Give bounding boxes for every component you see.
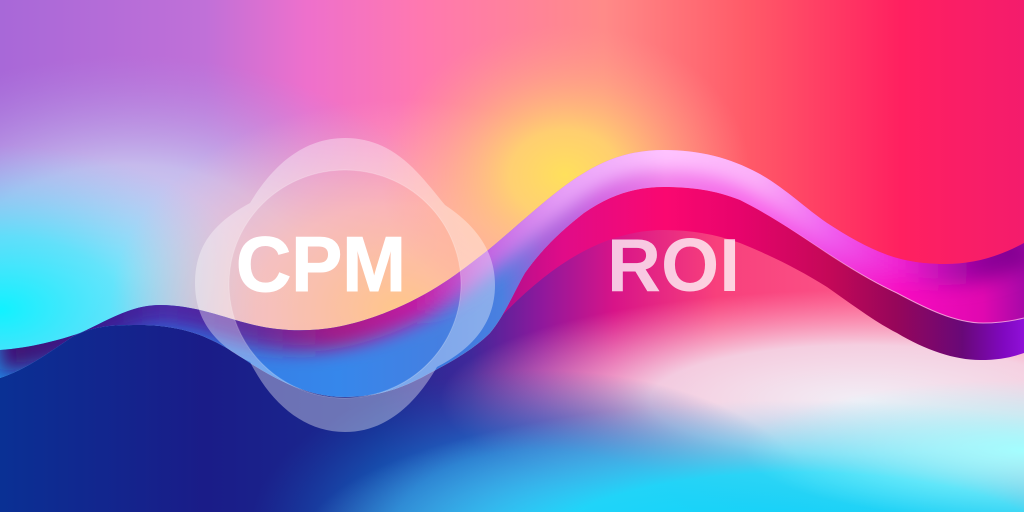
wave: dark magenta lower band [502, 187, 1024, 360]
translucent quatrefoil badge [195, 138, 495, 432]
wave: upper ribbon [0, 150, 1024, 397]
wave: ribbon highlight line [780, 222, 1024, 323]
badge: inner circle [229, 170, 461, 398]
label: CPM: CPM [236, 220, 406, 308]
label: ROI: ROI [607, 223, 740, 307]
badge: outer lobes [195, 138, 495, 432]
background: lower gradient field [0, 187, 1024, 512]
